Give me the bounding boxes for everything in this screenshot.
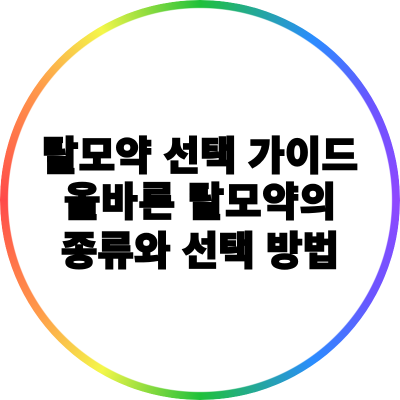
title: 탈모약 선택 가이드 [42,135,358,179]
title: 올바른 탈모약의 [64,181,336,225]
title: 종류와 선택 방법 [61,230,339,274]
